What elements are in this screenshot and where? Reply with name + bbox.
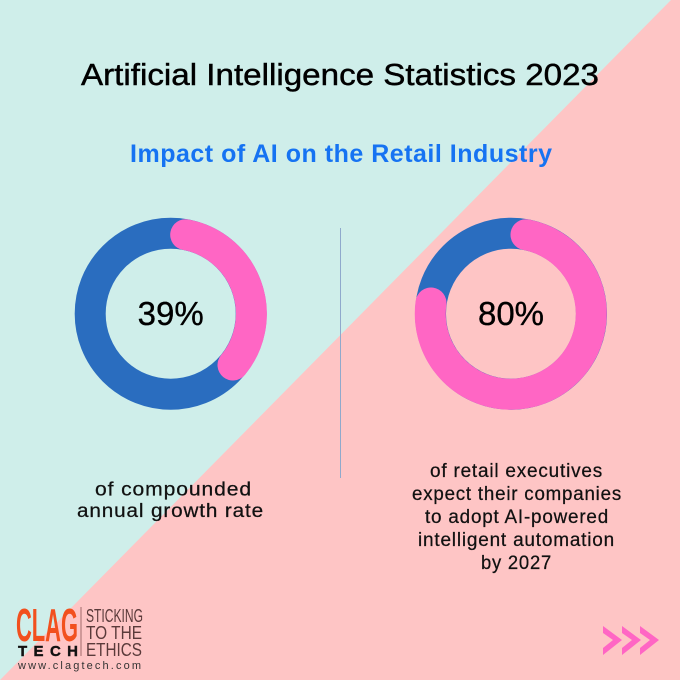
caption: right: to adopt AI-powered (425, 507, 609, 528)
logo: Clag Tech: TO THE (86, 623, 142, 643)
caption: left: annual growth rate (77, 501, 264, 522)
value: 39%: 39% (138, 295, 204, 332)
value: 80%: 80% (478, 295, 544, 332)
subtitle: Impact of AI on the Retail Industry (130, 140, 552, 168)
caption: left: of compounded (95, 480, 252, 500)
caption: right (412, 461, 622, 574)
donut chart: 80% (430, 233, 592, 394)
logo: Clag Tech: ETHICS (86, 640, 142, 660)
caption: right: intelligent automation (418, 530, 615, 551)
caption: left (77, 480, 264, 522)
icon: triple chevron arrows (603, 626, 659, 655)
caption: right: by 2027 (481, 553, 552, 574)
logo: Clag Tech: TECH (18, 643, 78, 660)
logo: Clag Tech (16, 599, 143, 672)
logo: Clag Tech: CLAG (16, 599, 78, 651)
logo: Clag Tech: STICKING (86, 606, 143, 626)
divider (340, 228, 342, 478)
caption: right: of retail executives (430, 461, 603, 482)
title: Artificial Intelligence Statistics 2023 (81, 58, 599, 92)
logo: Clag Tech: www.clagtech.com (17, 660, 141, 672)
donut chart: 39% (90, 233, 251, 394)
caption: right: expect their companies (412, 484, 622, 505)
